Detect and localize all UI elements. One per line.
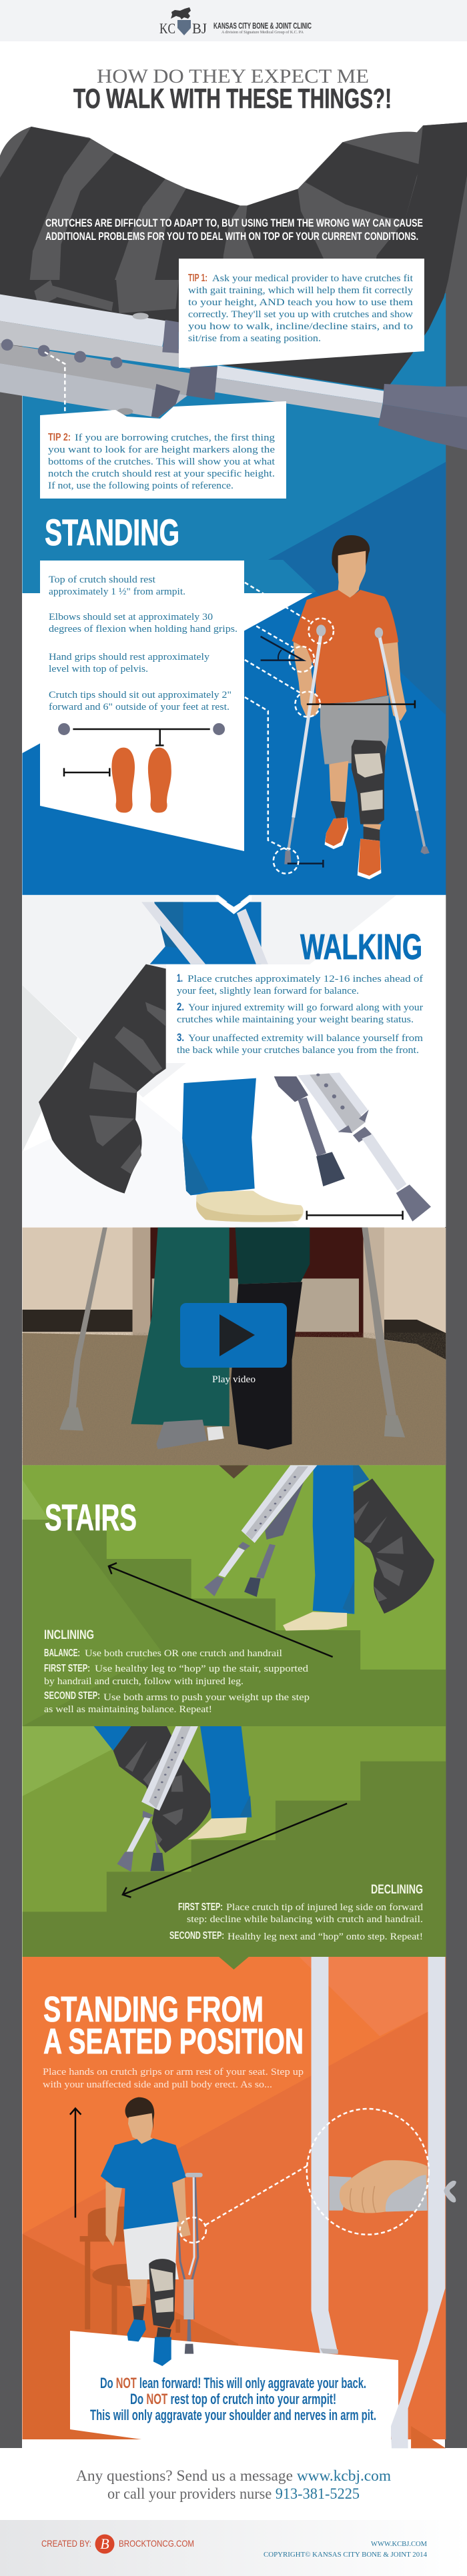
logo letters: KC	[159, 20, 175, 37]
website: WWW.KCBJ.COM	[371, 2541, 428, 2548]
text: inclining: SECOND STEP:	[44, 1690, 100, 1702]
text: seated instructions: Place hands on crutch grips or arm rest of your seat. Step up	[43, 2067, 304, 2077]
panel: tip 2	[40, 401, 286, 499]
icon: up arrow	[70, 2108, 81, 2217]
step 1: your feet, slightly lean forward for balance.	[177, 986, 359, 996]
icon: logo shield	[177, 20, 191, 35]
panel: tip 1	[179, 259, 424, 368]
panel: tip 2: If you are borrowing crutches, the first thing	[75, 433, 276, 443]
panel: standing instructions: Crutch tips should sit out approximately 2"	[49, 690, 231, 700]
contact text	[76, 2467, 391, 2502]
step 2	[177, 1000, 423, 1025]
contact text: or call your providers nurse 913-381-5225	[107, 2485, 360, 2502]
walking text box	[166, 927, 445, 1063]
text: inclining: as well as maintaining balance. Repeat!	[44, 1704, 212, 1715]
panel: standing instructions	[40, 561, 244, 851]
contact text: Any questions? Send us a message www.kcbj.com	[76, 2467, 391, 2484]
panel: standing instructions: degrees of flexion when holding hand grips.	[49, 624, 238, 635]
healthy leg	[182, 1078, 256, 1195]
illustration: large crutch tube	[0, 295, 467, 450]
panel: tip 2: TIP 2:	[48, 432, 71, 443]
dashed callouts	[245, 583, 334, 874]
panel: tip 1: with gait training, which will help them fit correctly	[188, 285, 414, 296]
heading: standing: STANDING	[45, 511, 179, 553]
shirt	[292, 590, 398, 704]
text: declining: Healthy leg next and “hop” onto step. Repeat!	[227, 1932, 423, 1942]
panel: tip 1: correctly. They'll set you up with crutches and show	[188, 309, 413, 320]
title	[73, 65, 392, 114]
diagram: foot placement	[58, 723, 225, 812]
hair	[332, 535, 370, 573]
created by credit: CREATED BY:	[41, 2538, 91, 2549]
text: inclining: Use healthy leg to “hop” up the stair, supported	[95, 1664, 309, 1674]
text: declining: SECOND STEP:	[169, 1930, 224, 1941]
text: inclining	[44, 1628, 310, 1715]
text: inclining: Use both arms to push your weight up the step	[103, 1692, 310, 1703]
icon: play button	[180, 1303, 287, 1385]
illustration: standing person with crutches	[245, 535, 430, 879]
panel: stairs declining	[22, 1726, 446, 1957]
heading: stairs: STAIRS	[45, 1496, 137, 1538]
title: HOW DO THEY EXPECT ME	[97, 65, 369, 87]
panel: walking	[22, 893, 446, 1227]
crutch bars close-up	[312, 1957, 338, 2354]
panel: standing instructions: forward and 6" outside of your feet at rest.	[49, 702, 229, 712]
panel: stairs inclining	[22, 1465, 446, 1726]
icon: B logo	[95, 2534, 115, 2554]
text: inclining: BALANCE:	[44, 1648, 80, 1659]
step 2: 2.	[177, 1000, 184, 1013]
heading: standing from a seated position	[43, 1989, 304, 2061]
arrow down stairs	[123, 1804, 347, 1898]
icon: logo tree	[171, 7, 191, 19]
callout: warning: Do NOT rest top of crutch into your armpit!	[130, 2391, 336, 2407]
panel: tip 1: Ask your medical provider to have crutches fit	[212, 273, 414, 284]
intro text	[45, 217, 423, 243]
step 1: Place crutches approximately 12-16 inches ahead of	[187, 974, 423, 984]
panel: tip 1: you how to walk, incline/decline stairs, and to	[188, 321, 413, 332]
measure lines	[261, 637, 303, 660]
step 3	[177, 1031, 423, 1056]
panel: standing instructions: Elbows should set at approximately 30	[49, 612, 213, 623]
text: inclining: FIRST STEP:	[44, 1663, 90, 1674]
panel: standing instructions: level with top of pelvis.	[49, 664, 148, 674]
illustration: knee brace boot close-up	[0, 122, 467, 895]
crutches	[265, 1482, 304, 1540]
panel: tip 2: If not, use the following points of reference.	[48, 481, 234, 491]
shorts	[320, 695, 389, 764]
panel: standing instructions: Hand grips should rest approximately	[49, 652, 210, 662]
callout: warning	[70, 2319, 398, 2448]
copyright: COPYRIGHT© KANSAS CITY BONE & JOINT 2014	[264, 2551, 428, 2559]
leg and foot	[353, 1465, 370, 1486]
step 2: Your injured extremity will go forward along with your	[188, 1002, 423, 1013]
heading: standing from a seated position: STANDING FROM	[43, 1989, 264, 2029]
header band with logo: BJ	[192, 20, 207, 37]
step 3: 3.	[177, 1031, 184, 1044]
feet over the box	[127, 2319, 193, 2366]
chair	[80, 2207, 180, 2334]
text: inclining: Use both crutches OR one crutch and handrail	[85, 1648, 282, 1659]
healthy leg	[187, 1816, 248, 1840]
clinic name: KANSAS CITY BONE & JOINT CLINIC	[213, 21, 312, 31]
icon: B logo: B	[100, 2535, 109, 2552]
back trouser, boot	[94, 1726, 131, 1751]
panel: tip 2: notch the crutch should rest at your specific height.	[48, 469, 275, 479]
heading: walking: WALKING	[300, 927, 422, 967]
crutch side view	[179, 2177, 198, 2319]
play label: Play video	[212, 1374, 256, 1385]
clinic subline: A division of Signature Medical Group of K.C. PA	[221, 30, 304, 35]
panel: standing instructions: approximately 1 ½" from armpit.	[49, 587, 185, 597]
legs	[329, 761, 348, 802]
panel: tip 2: bottoms of the crutches. This will show you at what	[48, 457, 276, 467]
step 3: the back while your crutches balance you from the front.	[177, 1045, 419, 1056]
boot	[352, 1478, 434, 1614]
text: declining: Place crutch tip of injured leg side on forward	[226, 1902, 424, 1913]
panel: tip 1: sit/rise from a seating position.	[188, 333, 321, 344]
seated person	[105, 2177, 191, 2246]
arrow up stairs	[109, 1563, 333, 1657]
header band with logo	[0, 0, 467, 41]
text: declining: step: decline while balancing with crutch and handrail.	[187, 1914, 423, 1925]
blue trouser and crutch top	[150, 902, 262, 964]
text: seated instructions	[43, 2067, 304, 2090]
step 2: crutches while maintaining your weight bearing status.	[177, 1014, 414, 1025]
face and neck	[338, 551, 366, 599]
crutches	[294, 633, 321, 818]
dashed callout to hand	[180, 2109, 429, 2243]
panel: tip 1: TIP 1:	[188, 273, 207, 284]
credit url: BROCKTONCG.COM	[119, 2538, 194, 2549]
text: declining	[169, 1883, 424, 1942]
boot side view	[39, 964, 166, 1194]
panel: tip 1: to your height, AND teach you how to use them	[188, 297, 413, 308]
crutches at floor	[274, 1076, 308, 1102]
step 1	[177, 972, 423, 996]
text: inclining: by handrail and crutch, follow with injured leg.	[44, 1676, 244, 1687]
step 3: Your unaffected extremity will balance yourself from	[188, 1033, 423, 1044]
panel: standing instructions: Top of crutch should rest	[49, 575, 156, 585]
text: declining: DECLINING	[371, 1883, 423, 1897]
step 1: 1.	[177, 972, 183, 984]
hand grip close-up	[329, 2176, 352, 2211]
text: inclining: INCLINING	[44, 1628, 94, 1642]
video still	[22, 1228, 446, 1465]
text: declining: FIRST STEP:	[178, 1902, 223, 1913]
arms	[294, 642, 406, 721]
crutches	[155, 1840, 161, 1853]
panel: tip 2: you want to look for are height markers along the	[48, 445, 275, 455]
heading: standing from a seated position: A SEATED POSITION	[43, 2021, 304, 2061]
text: seated instructions: with your unaffected side and pull body erect. As so...	[43, 2079, 272, 2090]
knee brace	[352, 740, 386, 824]
panel: standing from seated background	[22, 1957, 456, 2448]
footer	[0, 2520, 467, 2576]
